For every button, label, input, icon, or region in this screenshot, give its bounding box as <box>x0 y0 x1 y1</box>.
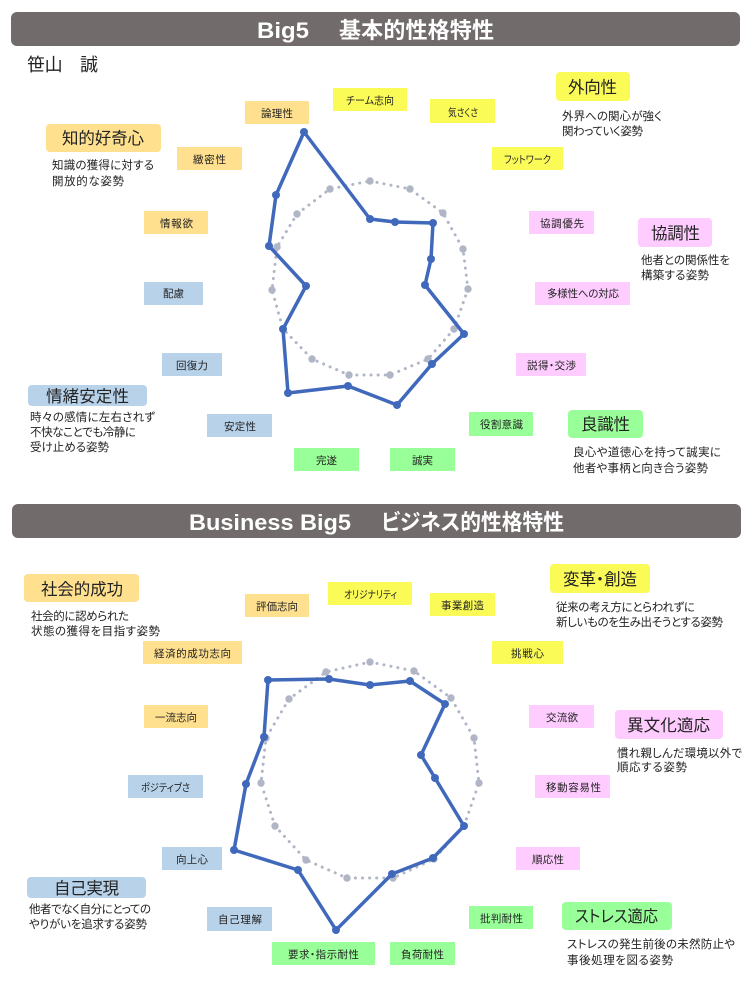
label: 事業創造: 事業創造 <box>441 599 484 612</box>
description: 自己実現 <box>29 903 151 931</box>
label: 順応性: 順応性 <box>532 853 564 866</box>
label: ポジティブさ <box>128 775 203 798</box>
label: 情報欲: 情報欲 <box>160 217 194 230</box>
category: ストレス適応 <box>562 902 672 930</box>
label: 回復力 <box>162 353 222 376</box>
label: 要求・指示耐性: 要求・指示耐性 <box>288 948 359 961</box>
label: 多様性への対応 <box>535 282 630 305</box>
description: 異文化適応 <box>617 746 742 774</box>
description: 社会的成功: 状態の獲得を目指す姿勢 <box>31 624 160 638</box>
category: 情緒安定性: 情緒安定性 <box>46 387 129 406</box>
label: 協調優先: 協調優先 <box>540 217 584 230</box>
label: 誠実 <box>390 448 455 471</box>
category: 社会的成功: 社会的成功 <box>41 580 123 599</box>
label: 完遂: 完遂 <box>316 455 338 467</box>
label: フットワーク <box>492 147 563 170</box>
label: 要求・指示耐性 <box>272 942 375 965</box>
header bar: Big5 <box>11 12 740 46</box>
label: 挑戦心 <box>492 641 563 664</box>
description: 知的好奇心 <box>52 158 154 188</box>
label: 説得・交渉 <box>516 353 586 376</box>
label: 協調優先 <box>529 211 594 234</box>
description: 情緒安定性: 受け止める姿勢 <box>30 440 110 454</box>
label: 批判耐性: 批判耐性 <box>480 912 523 925</box>
category: 異文化適応 <box>615 710 723 739</box>
label: 向上心: 向上心 <box>176 853 208 866</box>
label: チーム志向 <box>333 88 407 111</box>
description: 良識性: 他者や事柄と向き合う姿勢 <box>573 461 708 475</box>
label: 評価志向: 評価志向 <box>256 600 298 613</box>
category: 社会的成功 <box>24 574 139 602</box>
description: 変革・創造: 従来の考え方にとらわれずに <box>556 600 695 614</box>
label: 順応性 <box>516 847 580 870</box>
header bar: Business Big5: Business Big5 <box>189 510 351 535</box>
label: 挑戦心: 挑戦心 <box>511 647 544 660</box>
header bar: Business Big5 <box>12 504 741 538</box>
category: ストレス適応: ストレス適応 <box>575 907 658 926</box>
category: 良識性: 良識性 <box>581 415 630 434</box>
description: 協調性: 他者との関係性を <box>641 253 730 267</box>
label: 説得・交渉: 説得・交渉 <box>527 359 576 372</box>
label: 移動容易性 <box>535 775 610 798</box>
label: 完遂 <box>294 448 359 471</box>
person name: 笹山 誠 <box>27 55 98 75</box>
label: 交流欲 <box>529 705 594 728</box>
description: ストレス適応 <box>567 937 735 967</box>
description: 外向性: 関わっていく姿勢 <box>562 124 644 138</box>
label: チーム志向: チーム志向 <box>346 94 394 107</box>
radar chart: Business Big5 <box>230 658 483 934</box>
description: 外向性: 外界への関心が強く <box>562 109 662 123</box>
category: 自己実現 <box>27 877 146 898</box>
category: 外向性 <box>556 72 630 101</box>
description: 変革・創造 <box>556 600 724 629</box>
label: 安定性 <box>207 414 272 437</box>
description: 社会的成功: 社会的に認められた <box>31 609 129 623</box>
description: 知的好奇心: 開放的な姿勢 <box>52 174 124 188</box>
category: 異文化適応: 異文化適応 <box>627 716 710 735</box>
category: 情緒安定性 <box>28 385 147 406</box>
description: 外向性 <box>562 109 662 138</box>
description: 社会的成功 <box>31 609 160 638</box>
label: 緻密性: 緻密性 <box>193 153 226 166</box>
label: 一流志向 <box>144 705 208 728</box>
description: 自己実現: 他者でなく自分にとっての <box>29 903 151 916</box>
label: フットワーク: フットワーク <box>504 154 551 166</box>
label: 事業創造 <box>430 593 495 616</box>
description: 協調性: 構築する姿勢 <box>641 268 710 282</box>
panel: Business Big5 section <box>12 504 742 967</box>
category: 自己実現: 自己実現 <box>54 879 120 898</box>
category: 変革・創造: 変革・創造 <box>563 570 637 589</box>
label: 自己理解 <box>207 907 272 931</box>
category: 知的好奇心: 知的好奇心 <box>62 129 144 148</box>
label: 経済的成功志向: 経済的成功志向 <box>154 647 231 660</box>
label: オリジナリティ: オリジナリティ <box>344 589 397 601</box>
description: ストレス適応: 事後処理を図る姿勢 <box>567 953 674 967</box>
label: 役割意識 <box>469 412 533 436</box>
label: 交流欲: 交流欲 <box>546 711 578 724</box>
label: 誠実: 誠実 <box>412 454 434 467</box>
label: 役割意識: 役割意識 <box>480 418 524 431</box>
label: 移動容易性: 移動容易性 <box>546 781 601 794</box>
description: 変革・創造: 新しいものを生み出そうとする姿勢 <box>556 615 724 629</box>
description: 情緒安定性 <box>30 410 155 454</box>
description: 情緒安定性: 不快なことでも冷静に <box>30 425 136 439</box>
label: 評価志向 <box>245 594 309 617</box>
radar chart: Big5 <box>265 128 472 409</box>
label: 気さくさ <box>430 99 495 123</box>
label: 配慮: 配慮 <box>163 287 184 300</box>
category: 協調性: 協調性 <box>651 224 700 243</box>
label: 向上心 <box>162 847 222 870</box>
label: 配慮 <box>144 282 203 305</box>
label: 負荷耐性 <box>390 942 455 965</box>
label: 多様性への対応: 多様性への対応 <box>547 287 620 300</box>
category: 外向性: 外向性 <box>568 78 617 97</box>
header bar: Big5: 基本的性格特性 <box>339 18 494 43</box>
label: 一流志向: 一流志向 <box>155 711 197 724</box>
description: 協調性 <box>641 253 730 282</box>
description: 異文化適応: 慣れ親しんだ環境以外で <box>617 746 742 760</box>
panel: Big5 section <box>11 12 740 475</box>
category: 変革・創造 <box>550 564 650 593</box>
label: オリジナリティ <box>328 582 412 605</box>
category: 知的好奇心 <box>46 124 161 152</box>
label: 気さくさ: 気さくさ <box>448 106 478 119</box>
description: 良識性: 良心や道徳心を持って誠実に <box>573 445 721 459</box>
description: ストレス適応: ストレスの発生前後の未然防止や <box>567 937 735 951</box>
label: 負荷耐性: 負荷耐性 <box>401 948 444 961</box>
label: 情報欲 <box>144 211 208 234</box>
label: 回復力: 回復力 <box>176 359 208 372</box>
label: 緻密性 <box>177 147 242 170</box>
label: 経済的成功志向 <box>143 641 242 664</box>
header bar: Business Big5: ビジネス的性格特性 <box>381 510 564 535</box>
description: 良識性 <box>573 445 721 475</box>
label: 自己理解: 自己理解 <box>218 913 262 926</box>
label: 論理性: 論理性 <box>261 107 293 120</box>
label: 批判耐性 <box>469 906 533 929</box>
category: 協調性 <box>638 218 712 247</box>
category: 良識性 <box>568 410 643 438</box>
description: 知的好奇心: 知識の獲得に対する <box>52 158 154 172</box>
description: 情緒安定性: 時々の感情に左右されず <box>30 410 155 424</box>
description: 異文化適応: 順応する姿勢 <box>617 760 688 774</box>
label: ポジティブさ: ポジティブさ <box>141 781 190 794</box>
header bar: Big5: Big5 <box>257 18 309 43</box>
label: 論理性 <box>245 101 309 124</box>
description: 自己実現: やりがいを追求する姿勢 <box>29 917 148 931</box>
label: 安定性: 安定性 <box>224 420 256 433</box>
